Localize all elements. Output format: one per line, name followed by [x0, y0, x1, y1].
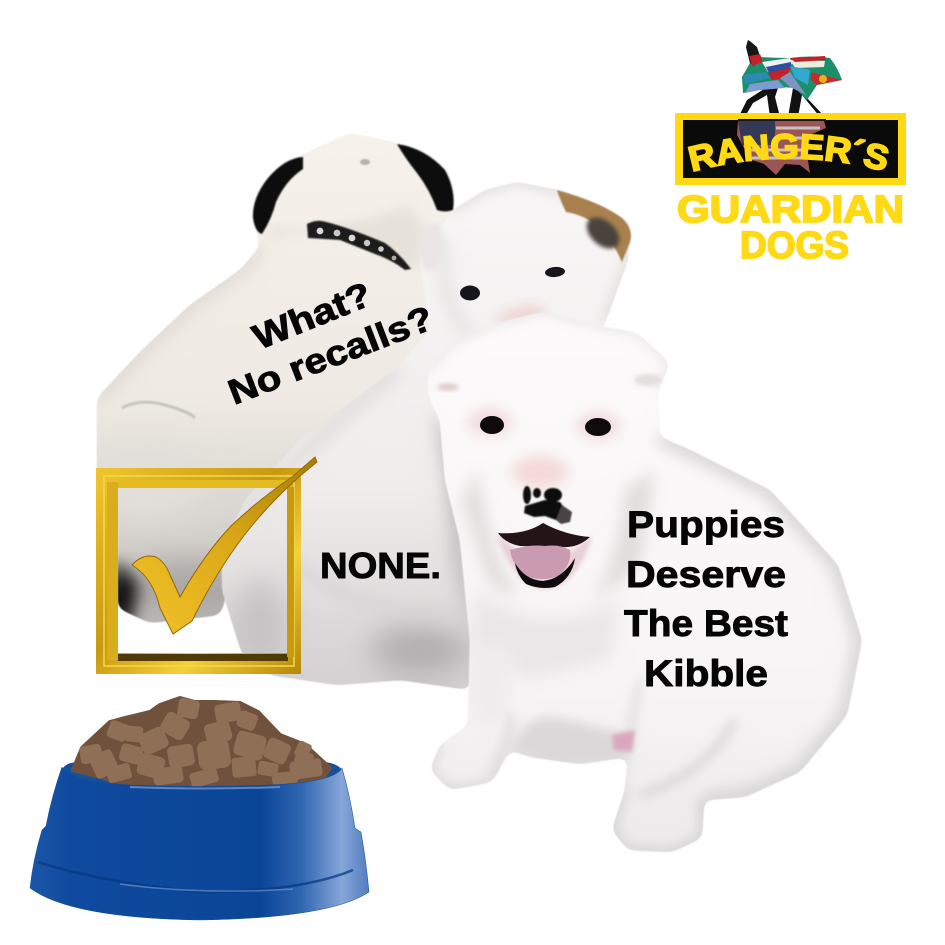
pink hind paw: [612, 730, 635, 752]
brown ear patch: [557, 190, 631, 262]
text: puppies deserve the best kibble: Puppies: [627, 504, 785, 545]
back puppy body fur: [85, 133, 470, 625]
black banner panel: [683, 120, 898, 178]
text: none: NONE.: [320, 545, 441, 586]
right ear shading: [634, 374, 662, 386]
flange highlight: [120, 884, 293, 891]
wordmark: Guardian: GUARDIAN: [677, 189, 904, 231]
text: puppies deserve the best kibble: [624, 504, 788, 694]
open mouth: [496, 523, 592, 589]
bowl base flange: [38, 862, 353, 892]
middle puppy fur: [222, 182, 630, 690]
bowl inner rim: [60, 762, 345, 790]
left eye: [460, 286, 480, 300]
text: puppies deserve the best kibble: The Best: [624, 603, 788, 644]
pink muzzle: [512, 456, 568, 488]
text: what no recalls: [223, 275, 439, 412]
icon: back puppy left ear: [253, 157, 303, 234]
right eye patch: [576, 412, 620, 440]
left eye patch: [468, 408, 512, 436]
yellow banner frame: [675, 113, 906, 185]
gold checkbox with tick: [96, 457, 317, 674]
kibble pile: [73, 697, 330, 788]
muzzle blush: [495, 306, 545, 325]
neck shading: [268, 205, 432, 272]
middle puppy: [222, 182, 631, 690]
right eye: [545, 266, 565, 278]
right eye: [585, 418, 611, 436]
wordmark: Dogs: DOGS: [740, 225, 849, 267]
logo: Ranger's Guardian Dogs: [675, 40, 906, 267]
nose: [523, 486, 572, 524]
wordmark: Ranger's: RANGER´S: [688, 133, 889, 172]
icon: USA flag map: [737, 121, 826, 175]
text: puppies deserve the best kibble: Deserve: [626, 554, 786, 595]
bowl rim highlight: [130, 787, 280, 788]
icon: flag dog: [738, 40, 842, 120]
back puppy: [85, 133, 470, 625]
faint marking on coat: [122, 402, 195, 418]
icon: tick: [132, 457, 317, 634]
dark ear fold: [581, 211, 625, 255]
icon: back puppy right ear: [397, 144, 454, 212]
left eye: [480, 416, 504, 434]
dog feet line: [738, 119, 826, 121]
bowl body: [30, 767, 369, 920]
left ear fold: [437, 384, 459, 390]
dog food bowl: [30, 697, 369, 920]
spot on head: [360, 159, 370, 165]
text: what no recalls: What?: [247, 275, 377, 357]
text: puppies deserve the best kibble: Kibble: [644, 653, 768, 694]
icon: studded collar: [307, 221, 411, 270]
front puppy: [428, 312, 862, 852]
text: what no recalls: No recalls?: [223, 299, 439, 412]
left folded ear: [418, 224, 446, 272]
front puppy fur: [428, 312, 862, 852]
